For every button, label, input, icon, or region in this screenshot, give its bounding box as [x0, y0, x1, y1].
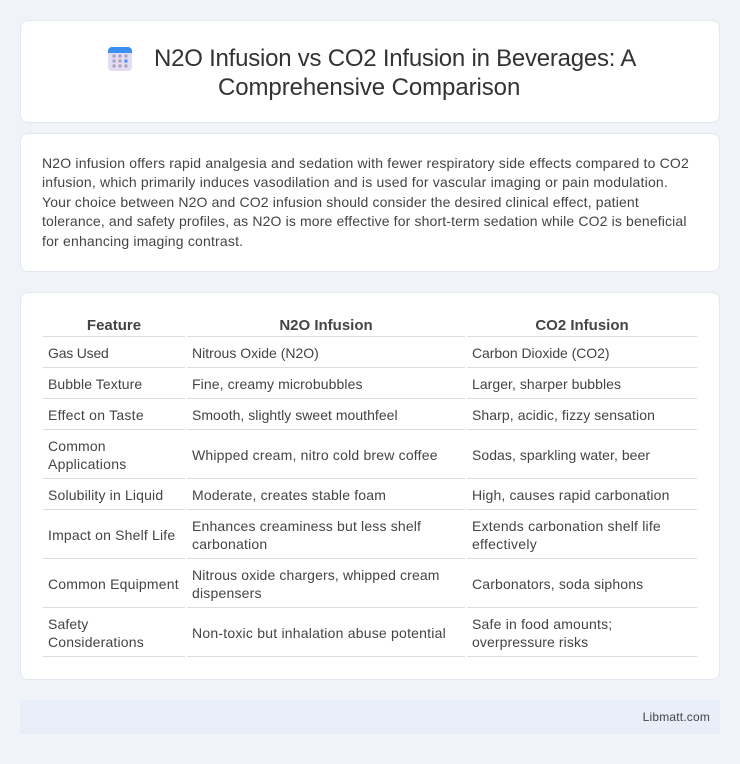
title [154, 45, 636, 101]
row: impact on shelf life: effectively [472, 536, 537, 552]
row: common equipment: dispensers [192, 585, 262, 601]
row: common applications [43, 438, 697, 479]
row: solubility in liquid [43, 487, 697, 510]
comparison table panel [20, 292, 720, 680]
row: common equipment: Nitrous oxide chargers, whipped cream [192, 567, 440, 583]
row: safety considerations: Safe in food amounts; [472, 616, 612, 632]
row: bubble texture: Fine, creamy microbubbles [192, 376, 363, 392]
row: common applications: Applications [48, 456, 126, 472]
row: bubble texture [43, 376, 697, 399]
intro text: for enhancing imaging contrast. [42, 233, 243, 249]
intro panel [20, 133, 720, 272]
row: common applications: Common [48, 438, 106, 454]
title: N2O Infusion vs CO2 Infusion in Beverages: A [154, 45, 636, 72]
row: gas used: Gas Used [48, 345, 109, 361]
intro text: Your choice between N2O and CO2 infusion should consider the desired clinical effect, patient [42, 194, 639, 210]
row: safety considerations: Considerations [48, 634, 144, 650]
title: Comprehensive Comparison [218, 74, 520, 101]
row: bubble texture: Bubble Texture [48, 376, 142, 392]
intro text [42, 155, 689, 249]
row: impact on shelf life: Impact on Shelf Life [48, 527, 175, 543]
column headers: CO2 Infusion [535, 317, 629, 334]
column headers: N2O Infusion [279, 317, 373, 334]
footer bar [20, 700, 720, 734]
row: common applications: Sodas, sparkling water, beer [472, 447, 650, 463]
row: safety considerations: overpressure risks [472, 634, 588, 650]
row: solubility in liquid: High, causes rapid carbonation [472, 487, 670, 503]
intro text: tolerance, and safety profiles, as N2O is more effective for short-term sedation while CO2 is beneficial [42, 213, 687, 229]
row: solubility in liquid: Solubility in Liquid [48, 487, 163, 503]
row: common equipment [43, 567, 697, 608]
row: safety considerations: Safety [48, 616, 88, 632]
row: impact on shelf life [43, 518, 697, 559]
row: impact on shelf life: carbonation [192, 536, 267, 552]
column headers [43, 317, 697, 337]
row: common equipment: Carbonators, soda siphons [472, 576, 643, 592]
header panel [20, 20, 720, 123]
row: gas used: Nitrous Oxide (N2O) [192, 345, 319, 361]
row: impact on shelf life: Extends carbonation shelf life [472, 518, 661, 534]
row: effect on taste: Smooth, slightly sweet mouthfeel [192, 407, 398, 423]
row: solubility in liquid: Moderate, creates stable foam [192, 487, 386, 503]
intro text: N2O infusion offers rapid analgesia and sedation with fewer respiratory side effects compared to CO2 [42, 155, 689, 171]
row: impact on shelf life: Enhances creaminess but less shelf [192, 518, 421, 534]
row: bubble texture: Larger, sharper bubbles [472, 376, 621, 392]
row: gas used: Carbon Dioxide (CO2) [472, 345, 610, 361]
row: effect on taste: Effect on Taste [48, 407, 144, 423]
row: common applications: Whipped cream, nitro cold brew coffee [192, 447, 438, 463]
icon: calendar [108, 47, 132, 71]
row: effect on taste [43, 407, 697, 430]
row: effect on taste: Sharp, acidic, fizzy sensation [472, 407, 655, 423]
row: common equipment: Common Equipment [48, 576, 179, 592]
row: safety considerations: Non-toxic but inhalation abuse potential [192, 625, 446, 641]
row: gas used [43, 345, 697, 368]
footer text: Libmatt.com [643, 710, 710, 724]
column headers: Feature [87, 317, 141, 334]
intro text: infusion, which primarily induces vasodilation and is used for vascular imaging or pain modulation. [42, 174, 668, 190]
